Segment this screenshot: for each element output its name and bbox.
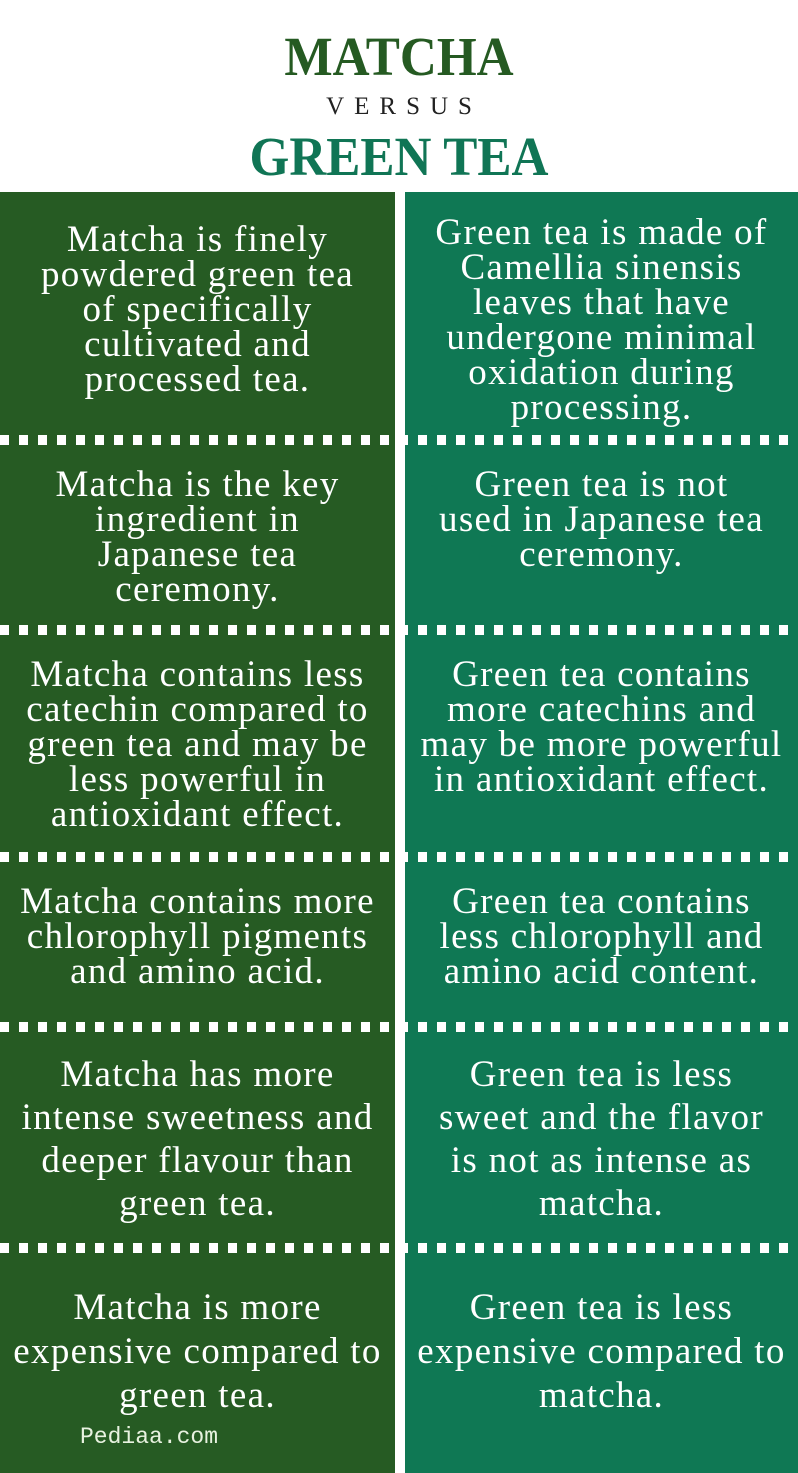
text: green tea flavour: sweet and the flavor (439, 1097, 764, 1138)
text: green tea price: expensive compared to (417, 1331, 786, 1372)
text: green tea ceremony: ceremony. (519, 534, 684, 575)
text: matcha catechin: catechin compared to (26, 689, 369, 730)
text: green tea flavour: is not as intense as (451, 1140, 752, 1181)
text: matcha flavour (22, 1054, 374, 1224)
text: green tea definition (435, 212, 768, 428)
panel: matcha column (0, 192, 395, 1473)
text: green tea catechin: in antioxidant effect. (434, 759, 769, 800)
subtitle: versus: VERSUS (326, 93, 482, 120)
text: matcha catechin: less powerful in (69, 759, 326, 800)
logo: pediaa.com: Pediaa.com (80, 1424, 218, 1450)
text: green tea definition: processing. (511, 387, 692, 428)
text: green tea ceremony: used in Japanese tea (439, 499, 764, 540)
text: matcha flavour: Matcha has more (60, 1054, 335, 1095)
text: matcha definition: processed tea. (85, 359, 310, 400)
text: matcha definition: Matcha is finely (67, 219, 328, 260)
text: matcha flavour: green tea. (119, 1183, 276, 1224)
text: matcha catechin (26, 654, 369, 835)
title: green tea: GREEN TEA (250, 126, 548, 187)
text: green tea catechin: more catechins and (447, 689, 756, 730)
text: matcha ceremony (55, 464, 340, 610)
text: green tea catechin: Green tea contains (452, 654, 751, 695)
text: matcha definition (41, 219, 354, 400)
text: matcha definition: powdered green tea (41, 254, 354, 295)
text: green tea catechin (421, 654, 782, 800)
text: matcha definition: of specifically (82, 289, 313, 330)
text: green tea price: matcha. (539, 1375, 664, 1416)
text: green tea definition: undergone minimal (446, 317, 757, 358)
text: green tea flavour: Green tea is less (470, 1054, 733, 1095)
text: matcha flavour: intense sweetness and (22, 1097, 374, 1138)
text: matcha catechin: Matcha contains less (30, 654, 365, 695)
text: green tea ceremony (439, 464, 764, 575)
text: matcha ceremony: ceremony. (115, 569, 280, 610)
text: green tea definition: leaves that have (473, 282, 730, 323)
text: matcha chlorophyll: Matcha contains more (20, 881, 375, 922)
text: green tea chlorophyll: amino acid content. (444, 951, 759, 992)
text: matcha chlorophyll: chlorophyll pigments (27, 916, 368, 957)
text: matcha price: green tea. (119, 1375, 276, 1416)
text: matcha catechin: green tea and may be (27, 724, 368, 765)
text: matcha catechin: antioxidant effect. (51, 794, 344, 835)
text: green tea flavour (439, 1054, 764, 1224)
text: green tea chlorophyll: Green tea contains (452, 881, 751, 922)
text: matcha chlorophyll: and amino acid. (70, 951, 325, 992)
text: green tea definition: Camellia sinensis (460, 247, 743, 288)
text: green tea price: Green tea is less (470, 1287, 733, 1328)
text: matcha price: Matcha is more (73, 1287, 322, 1328)
text: green tea definition: Green tea is made of (435, 212, 768, 253)
text: green tea catechin: may be more powerful (421, 724, 782, 765)
text: green tea chlorophyll: less chlorophyll and (439, 916, 764, 957)
text: green tea definition: oxidation during (468, 352, 735, 393)
text: matcha chlorophyll (20, 881, 375, 992)
text: matcha definition: cultivated and (84, 324, 311, 365)
text: green tea price (417, 1287, 786, 1416)
text: matcha ceremony: ingredient in (95, 499, 300, 540)
text: matcha flavour: deeper flavour than (41, 1140, 354, 1181)
panel: green tea column (405, 192, 798, 1473)
text: green tea flavour: matcha. (539, 1183, 664, 1224)
text: matcha price (13, 1287, 382, 1416)
text: green tea ceremony: Green tea is not (474, 464, 729, 505)
text: matcha ceremony: Japanese tea (98, 534, 297, 575)
text: matcha price: expensive compared to (13, 1331, 382, 1372)
text: matcha ceremony: Matcha is the key (55, 464, 340, 505)
text: green tea chlorophyll (439, 881, 764, 992)
title: matcha: MATCHA (284, 26, 514, 87)
